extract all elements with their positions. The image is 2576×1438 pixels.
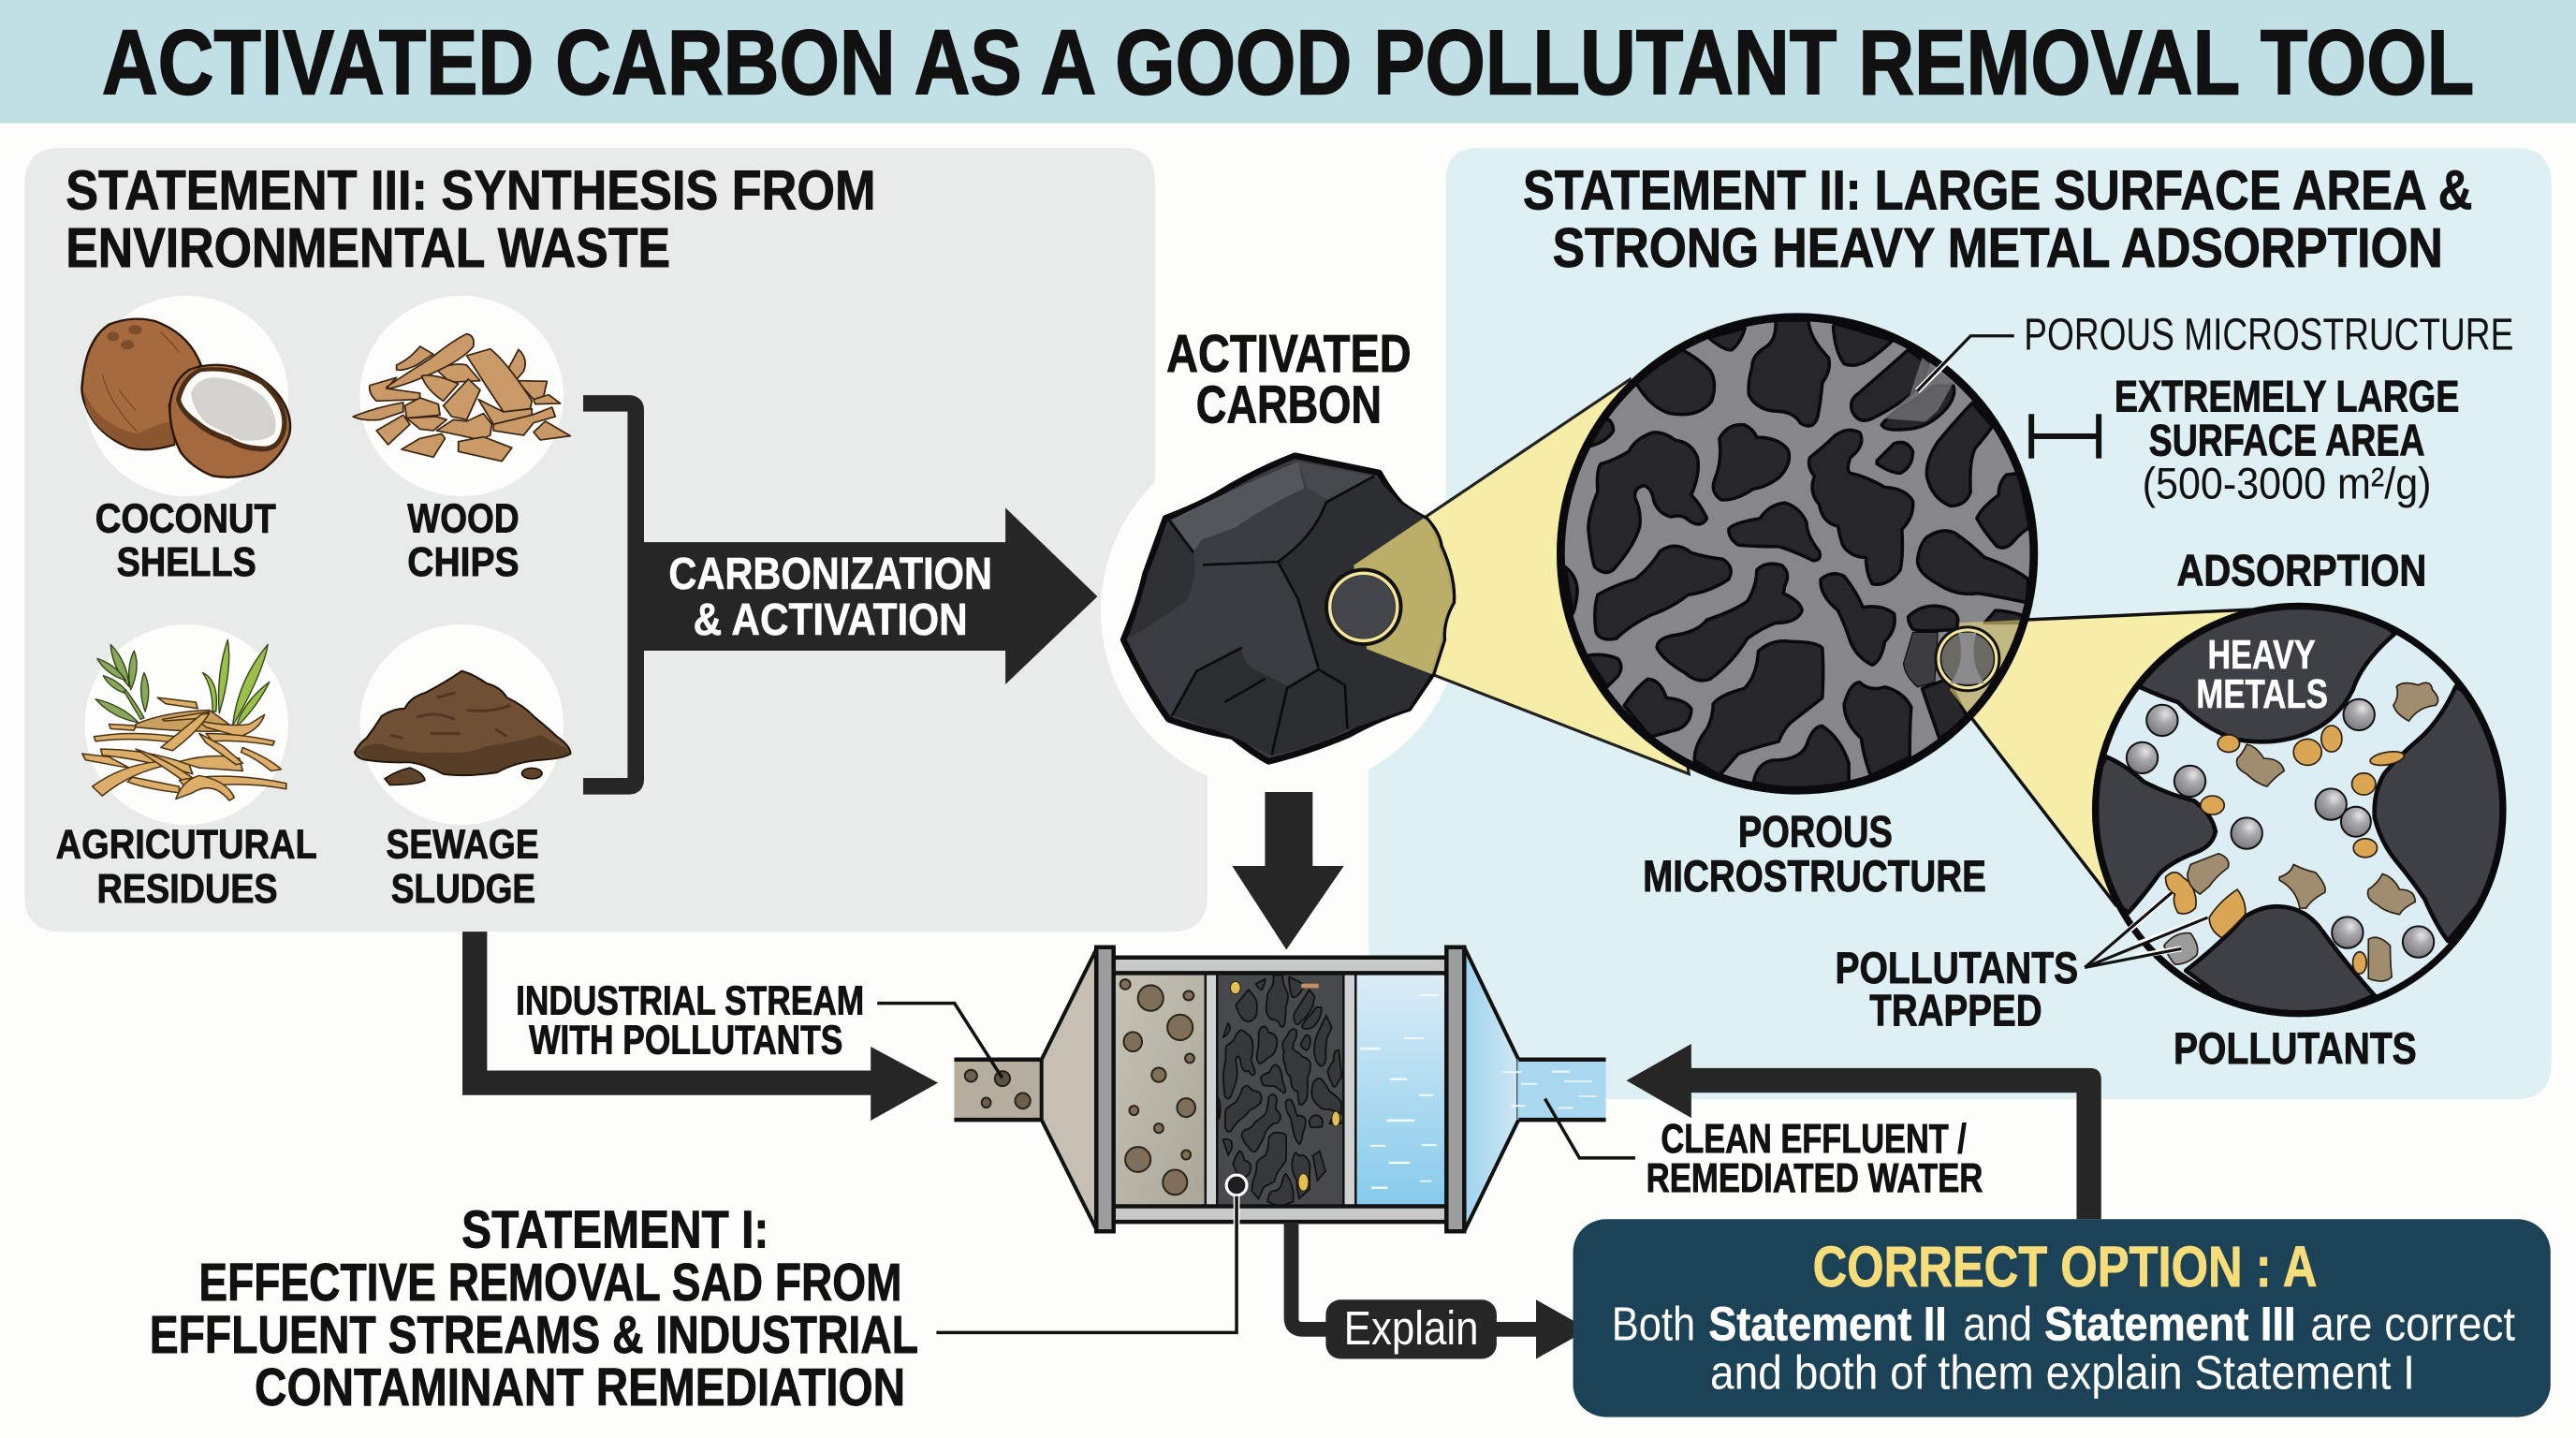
text: extremely large surface area: SURFACE AREA — [2149, 417, 2425, 466]
arrow: explain connector: Explain — [1344, 1301, 1479, 1355]
heading: activated carbon: ACTIVATED — [1166, 324, 1412, 383]
callout: statement I — [150, 1196, 1237, 1416]
waste source labels: SEWAGE — [386, 822, 539, 868]
callout: correct option: are correct — [2310, 1298, 2515, 1351]
waste source labels: AGRICUTURAL — [56, 822, 317, 868]
inlet pipe — [954, 1060, 1043, 1120]
chart: adsorption pore circle — [2091, 603, 2507, 1017]
text: extremely large surface area: (500-3000 m²/g) — [2143, 459, 2432, 508]
heading: statement III: ENVIRONMENTAL WASTE — [66, 216, 670, 279]
separator plates — [1206, 973, 1355, 1206]
icon: sewage sludge — [355, 624, 570, 825]
panel: statement II background — [1368, 148, 2552, 1099]
housing rails — [1114, 958, 1446, 1222]
chart: porous microstructure circle — [1556, 313, 2039, 795]
callout: statement I: CONTAMINANT REMEDIATION — [255, 1357, 905, 1416]
callout: correct option — [1573, 1219, 2551, 1417]
callout: pollutants trapped: TRAPPED — [1869, 987, 2042, 1036]
heading: activated carbon — [1166, 324, 1412, 434]
arrowhead: inlet — [871, 1047, 938, 1121]
callout: industrial stream: WITH POLLUTANTS — [529, 1018, 842, 1064]
callout: correct option: and both of them explain Statement I — [1710, 1346, 2415, 1400]
icon: wood chips — [353, 296, 570, 496]
heading: statement II: STRONG HEAVY METAL ADSORPTION — [1553, 216, 2443, 279]
waste source labels: SLUDGE — [391, 866, 535, 912]
arrow: waste stream into filter — [475, 932, 874, 1083]
waste source labels: CHIPS — [407, 539, 520, 585]
callout: porous microstructure — [1917, 309, 2513, 391]
callout: clean effluent: CLEAN EFFLUENT / — [1661, 1116, 1967, 1162]
waste source labels: SHELLS — [117, 539, 256, 585]
arrow: carbon down to filter — [1232, 792, 1344, 949]
callout: statement I: STATEMENT I: — [461, 1200, 768, 1259]
arrow: carbonization and activation: & ACTIVATION — [694, 594, 968, 645]
leader pin in carbon bed — [1226, 1175, 1247, 1225]
chamber: clean water — [1356, 974, 1446, 1206]
label: pollutants: POLLUTANTS — [2174, 1024, 2417, 1074]
callout: correct option: CORRECT OPTION : A — [1813, 1235, 2317, 1299]
outlet cone — [1464, 947, 1518, 1231]
inlet cone — [1042, 947, 1097, 1231]
chart: adsorption pore circle: METALS — [2196, 671, 2328, 717]
callout: industrial stream: INDUSTRIAL STREAM — [516, 977, 864, 1023]
heading: activated carbon: CARBON — [1196, 375, 1382, 434]
callout: correct option: Both — [1612, 1298, 1695, 1351]
icon: coconut shells — [81, 296, 290, 496]
arrow: carbonization and activation — [583, 404, 1097, 786]
waste source labels: RESIDUES — [97, 866, 278, 912]
zoom cone: microstructure to adsorption — [1950, 609, 2252, 905]
icon: agricultural residues — [82, 624, 288, 825]
chart: adsorption pore circle: HEAVY — [2208, 632, 2316, 678]
zoom cone: carbon to microstructure — [1354, 379, 1689, 774]
waste source labels: WOOD — [407, 495, 520, 541]
text: extremely large surface area: EXTREMELY LARGE — [2115, 372, 2459, 421]
chamber: gravel prefilter — [1115, 974, 1206, 1206]
flanges — [1096, 947, 1464, 1231]
label: porous microstructure: MICROSTRUCTURE — [1643, 852, 1986, 902]
chamber: activated carbon bed — [1217, 974, 1343, 1207]
panel: statement III background — [24, 148, 1208, 932]
text: extremely large surface area — [2115, 372, 2459, 508]
callout: pollutants trapped: POLLUTANTS — [1835, 944, 2078, 993]
arrow: explain connector — [1292, 1223, 1588, 1358]
callout: pollutants trapped — [1835, 892, 2208, 1036]
chart: filter cartridge — [954, 947, 1606, 1231]
white halo around carbon — [1101, 431, 1462, 961]
arrow: treated water returning from answer — [1627, 1044, 2101, 1219]
heading: statement II — [1523, 158, 2472, 279]
callout: correct option: Statement II — [1708, 1298, 1947, 1351]
label: porous microstructure — [1643, 807, 1986, 902]
outlet pipe — [1502, 1060, 1606, 1120]
heading: statement III — [66, 158, 875, 279]
label: porous microstructure: POROUS — [1738, 807, 1893, 857]
callout: clean effluent — [1544, 1098, 1983, 1201]
waste source labels: COCONUT — [95, 495, 276, 541]
callout: correct option: and — [1963, 1298, 2032, 1351]
icon: dimension bracket — [2031, 414, 2099, 459]
callout: industrial stream — [516, 977, 1003, 1078]
callout: statement I: EFFECTIVE REMOVAL SAD FROM — [198, 1253, 902, 1312]
icon: activated carbon lump — [1120, 452, 1456, 765]
waste source labels — [56, 495, 539, 912]
callout: statement I: EFFLUENT STREAMS & INDUSTRIAL — [150, 1305, 918, 1364]
callout: clean effluent: REMEDIATED WATER — [1647, 1155, 1983, 1201]
label: adsorption: ADSORPTION — [2177, 546, 2426, 595]
arrow: carbonization and activation: CARBONIZATION — [668, 549, 992, 599]
heading: statement III: STATEMENT III: SYNTHESIS FROM — [66, 158, 875, 221]
callout: correct option: Statement III — [2044, 1298, 2296, 1351]
